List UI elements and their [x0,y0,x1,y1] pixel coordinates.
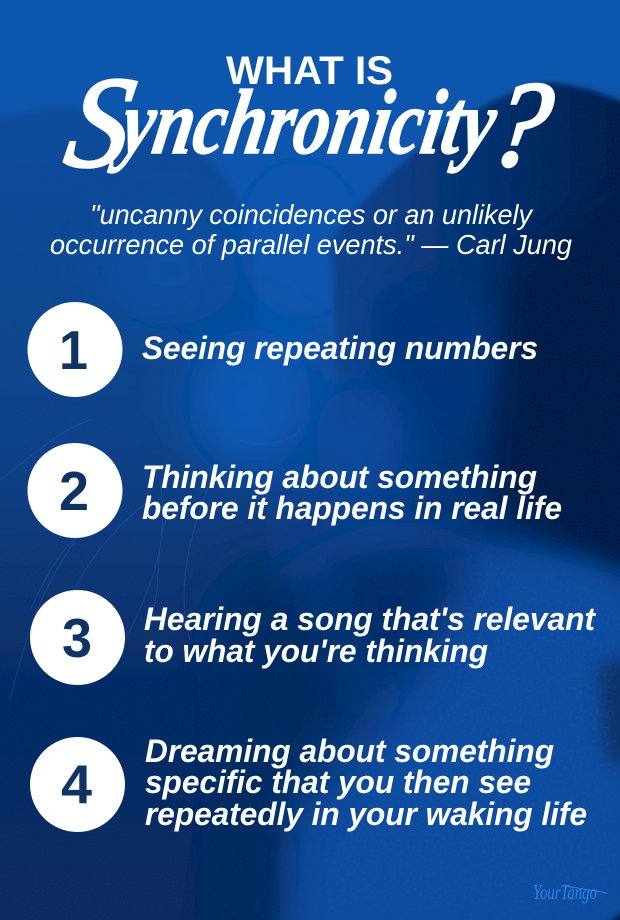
quote from Carl Jung: "uncanny coincidences or an unlikely [90,199,534,230]
list item 2 [28,443,562,538]
item 2 text [142,459,562,526]
item 3 text: Hearing a song that's relevant [144,601,596,637]
number badge 2: 2 [59,460,89,522]
heading: what is: WHAT IS [226,49,393,93]
item 3 text [144,601,596,669]
number badge 1 [28,302,122,397]
heading: synchronicity script: ? [480,56,562,192]
item 4 text: Dreaming about something [145,733,554,769]
heading: synchronicity script: S [57,51,144,195]
item 2 text: Thinking about something [142,459,537,495]
list item 1 [28,302,538,397]
item 3 text: to what you're thinking [144,633,488,669]
item 2 text: before it happens in real life [142,490,562,526]
item 4 text: specific that you then see [145,764,531,800]
item 4 text: repeatedly in your waking life [145,796,587,832]
number badge 4: 4 [61,753,92,815]
list item 3 [30,590,596,685]
heading: synchronicity script: ynchronicity [107,72,505,174]
number badge 1: 1 [59,319,88,381]
number badge 3: 3 [62,607,92,669]
item 1 text: Seeing repeating numbers [142,330,538,366]
number badge 4 [30,737,125,832]
number badge 3 [30,590,125,685]
item 4 text [145,733,587,832]
quote from Carl Jung [50,199,572,260]
quote from Carl Jung: occurrence of parallel events." — Carl Jung [50,229,572,260]
number badge 2 [28,443,122,538]
list item 4 [30,733,587,832]
